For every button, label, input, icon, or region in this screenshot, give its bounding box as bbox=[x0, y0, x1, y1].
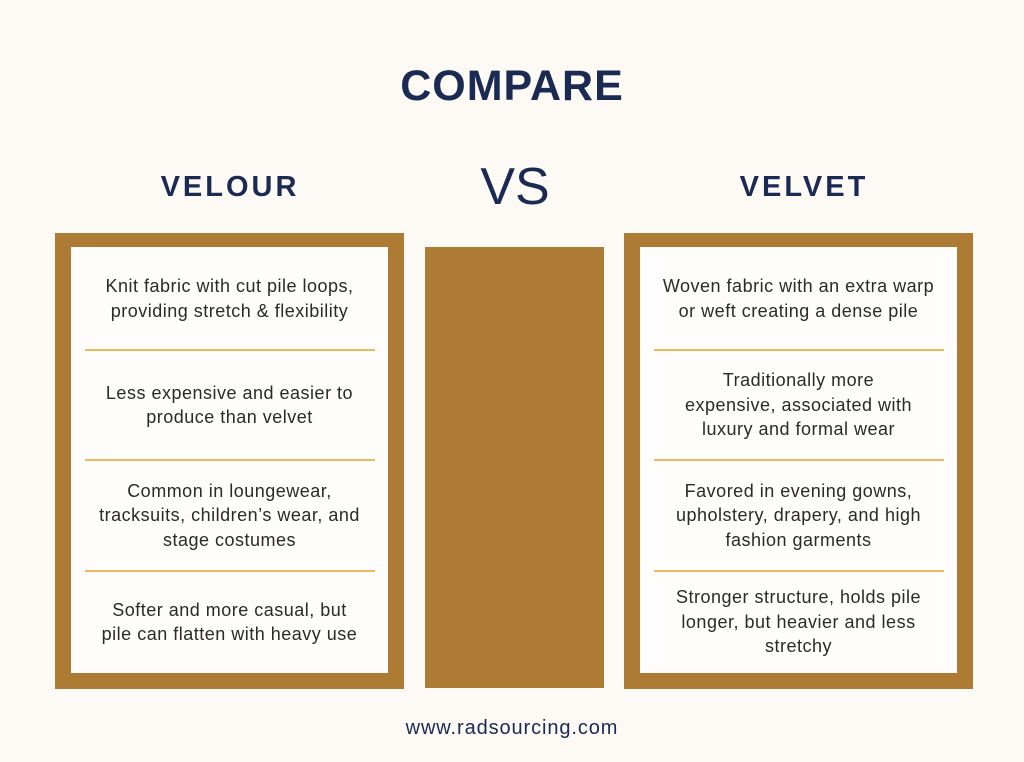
heading: velvet: VELVET bbox=[740, 171, 868, 203]
text: velvet 2: Traditionally more bbox=[723, 370, 874, 390]
text: velvet 3: Favored in evening gowns, bbox=[685, 481, 912, 501]
title: COMPARE bbox=[400, 62, 624, 110]
text: velvet 3 bbox=[676, 481, 921, 550]
text: velour 3: stage costumes bbox=[163, 530, 296, 550]
text: velvet 3: fashion garments bbox=[725, 530, 872, 550]
text: velour 4 bbox=[102, 600, 357, 644]
text: velour 2: Less expensive and easier to bbox=[106, 382, 353, 402]
text: velour 2: produce than velvet bbox=[146, 407, 313, 427]
panel: velour bbox=[55, 233, 404, 689]
text: velvet 4: Stronger structure, holds pile bbox=[676, 587, 921, 607]
text: velvet 4 bbox=[676, 587, 921, 656]
text: velour 3 bbox=[99, 481, 360, 550]
text: velvet 1 bbox=[663, 276, 934, 321]
text: velvet 4: stretchy bbox=[765, 636, 832, 656]
text: velour 1 bbox=[105, 276, 354, 321]
heading: velour: VELOUR bbox=[161, 171, 299, 203]
text: velour 3: tracksuits, children’s wear, and bbox=[99, 505, 360, 525]
text: velour 4: Softer and more casual, but bbox=[112, 600, 347, 620]
text: velour 2 bbox=[106, 382, 353, 427]
text: velvet 4: longer, but heavier and less bbox=[681, 612, 916, 632]
text: velvet 1: Woven fabric with an extra warp bbox=[663, 276, 934, 296]
text: velvet 3: upholstery, drapery, and high bbox=[676, 505, 921, 525]
text: velvet 2 bbox=[685, 370, 912, 439]
text: velour 1: providing stretch & flexibility bbox=[111, 300, 348, 320]
middle bar bbox=[425, 247, 604, 688]
text: velour 3: Common in loungewear, bbox=[127, 481, 332, 501]
text: velour 1: Knit fabric with cut pile loops, bbox=[105, 276, 354, 296]
text: velour 4: pile can flatten with heavy use bbox=[102, 624, 357, 644]
heading: vs: VS bbox=[480, 158, 550, 216]
footer: www.radsourcing.com bbox=[406, 717, 618, 739]
text: velvet 1: or weft creating a dense pile bbox=[679, 300, 918, 320]
panel: velvet bbox=[624, 233, 973, 689]
text: velvet 2: expensive, associated with bbox=[685, 395, 912, 415]
text: velvet 2: luxury and formal wear bbox=[702, 419, 895, 439]
